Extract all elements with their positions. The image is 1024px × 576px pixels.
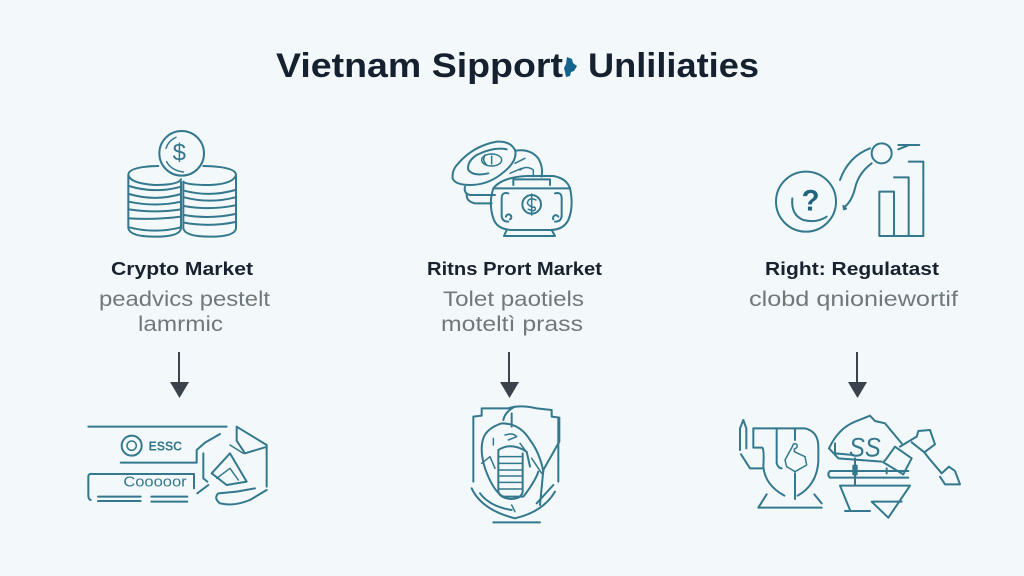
text: crypto description bbox=[99, 288, 270, 336]
text: crypto description: lamrmic bbox=[138, 313, 223, 336]
label: rights port market: Ritns Prort Market bbox=[427, 259, 602, 279]
icon: question mark with trend chart: ? bbox=[802, 185, 820, 218]
panel: rights port market bbox=[427, 142, 602, 522]
label: crypto market: Crypto Market bbox=[111, 259, 253, 279]
icon: wallet and coins bbox=[453, 142, 572, 236]
arrow: rights down bbox=[500, 352, 519, 398]
icon: question mark with trend chart bbox=[776, 143, 923, 236]
text: crypto description: peadvics pestelt bbox=[99, 288, 270, 311]
icon: coin stacks: $ bbox=[173, 140, 186, 167]
panel: crypto market bbox=[88, 131, 270, 504]
label: regulation: Right: Regulatast bbox=[765, 259, 939, 279]
arrow: crypto down bbox=[170, 352, 189, 398]
icon: shield, map and scale bbox=[740, 416, 960, 518]
text: rights description: moteltì prass bbox=[441, 313, 583, 336]
title: Unliliaties bbox=[588, 47, 759, 85]
icon: coin stacks bbox=[128, 131, 236, 237]
title bbox=[276, 47, 759, 85]
icon: exchange card and hand: Cooooor bbox=[123, 474, 187, 490]
icon: shield with beetle bbox=[472, 406, 559, 522]
arrow: regulation down bbox=[848, 352, 867, 398]
icon: exchange card and hand: ESSC bbox=[149, 439, 182, 453]
text: rights description: Tolet paotiels bbox=[443, 288, 584, 311]
text: rights description bbox=[441, 288, 584, 336]
text: regulation description: clobd qnioniewortif bbox=[749, 288, 958, 311]
panel: regulation bbox=[740, 143, 960, 518]
title: Vietnam Sipport bbox=[276, 47, 563, 85]
icon: shield, map and scale: SS bbox=[849, 433, 881, 463]
icon: exchange card and hand bbox=[88, 427, 267, 504]
